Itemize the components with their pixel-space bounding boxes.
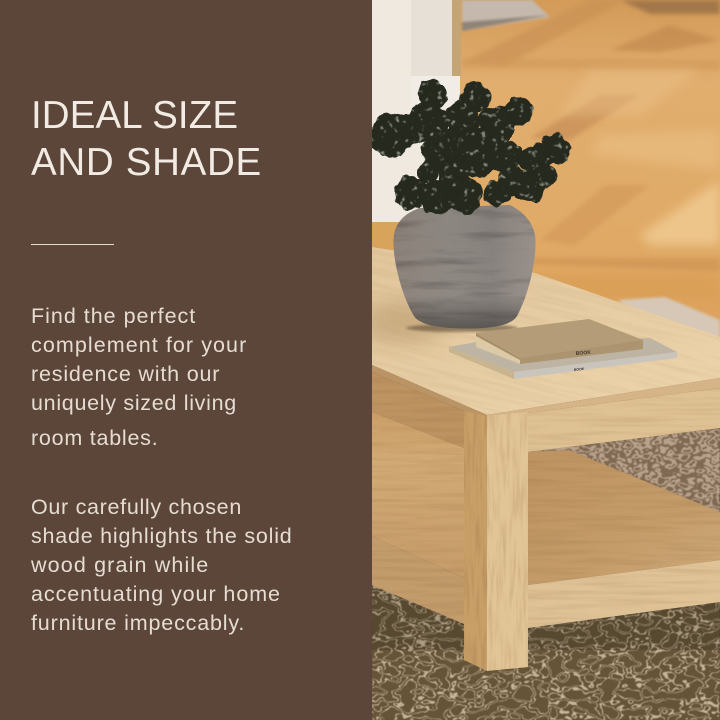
upper book <box>476 319 643 364</box>
left apron <box>372 372 464 448</box>
rug under table <box>372 580 720 720</box>
white wall and door frame <box>372 0 461 250</box>
rug edge behind table <box>618 297 720 345</box>
text block: second paragraph <box>31 495 292 635</box>
vase <box>390 200 540 332</box>
text block: second paragraph: accentuating your home <box>31 582 281 606</box>
heading <box>31 94 262 184</box>
lower book <box>449 338 677 379</box>
text block: second paragraph: Our carefully chosen <box>31 495 242 519</box>
left shelf <box>372 412 464 578</box>
heading: IDEAL SIZE <box>31 94 238 137</box>
leg grain <box>464 412 528 670</box>
text block: second paragraph: wood grain while <box>31 553 209 577</box>
rug in background top <box>462 0 550 31</box>
lower book: BOOK <box>574 367 585 372</box>
text block: first paragraph: uniquely sized living <box>31 391 237 415</box>
plant <box>369 79 571 215</box>
rug seen through the shelf gap <box>528 425 720 515</box>
right apron <box>528 388 720 452</box>
text block: second paragraph: furniture impeccably. <box>31 611 245 635</box>
lower left apron <box>372 536 464 624</box>
table top edge, right <box>487 378 720 421</box>
leg front face <box>487 412 528 671</box>
text block: first paragraph: complement for your <box>31 333 247 357</box>
text block: first paragraph: residence with our <box>31 362 220 386</box>
books <box>449 319 677 379</box>
heading: AND SHADE <box>31 141 262 184</box>
background floor <box>372 0 720 340</box>
table top edge, left <box>372 365 487 421</box>
coffee table <box>372 247 720 671</box>
leg side face <box>464 411 487 671</box>
photo: coffee table with vase and books <box>372 0 720 720</box>
upper book: BOOK <box>576 350 592 357</box>
shelf and apron grain <box>372 382 720 626</box>
table top <box>372 247 720 415</box>
right shelf <box>528 450 720 585</box>
text block: second paragraph: shade highlights the solid <box>31 524 292 548</box>
lower right apron <box>528 560 720 628</box>
text block: first paragraph: room tables. <box>31 426 158 450</box>
divider line <box>31 244 114 245</box>
text block: first paragraph: Find the perfect <box>31 304 196 328</box>
text block: first paragraph <box>31 304 247 450</box>
panel: text column <box>0 0 372 720</box>
